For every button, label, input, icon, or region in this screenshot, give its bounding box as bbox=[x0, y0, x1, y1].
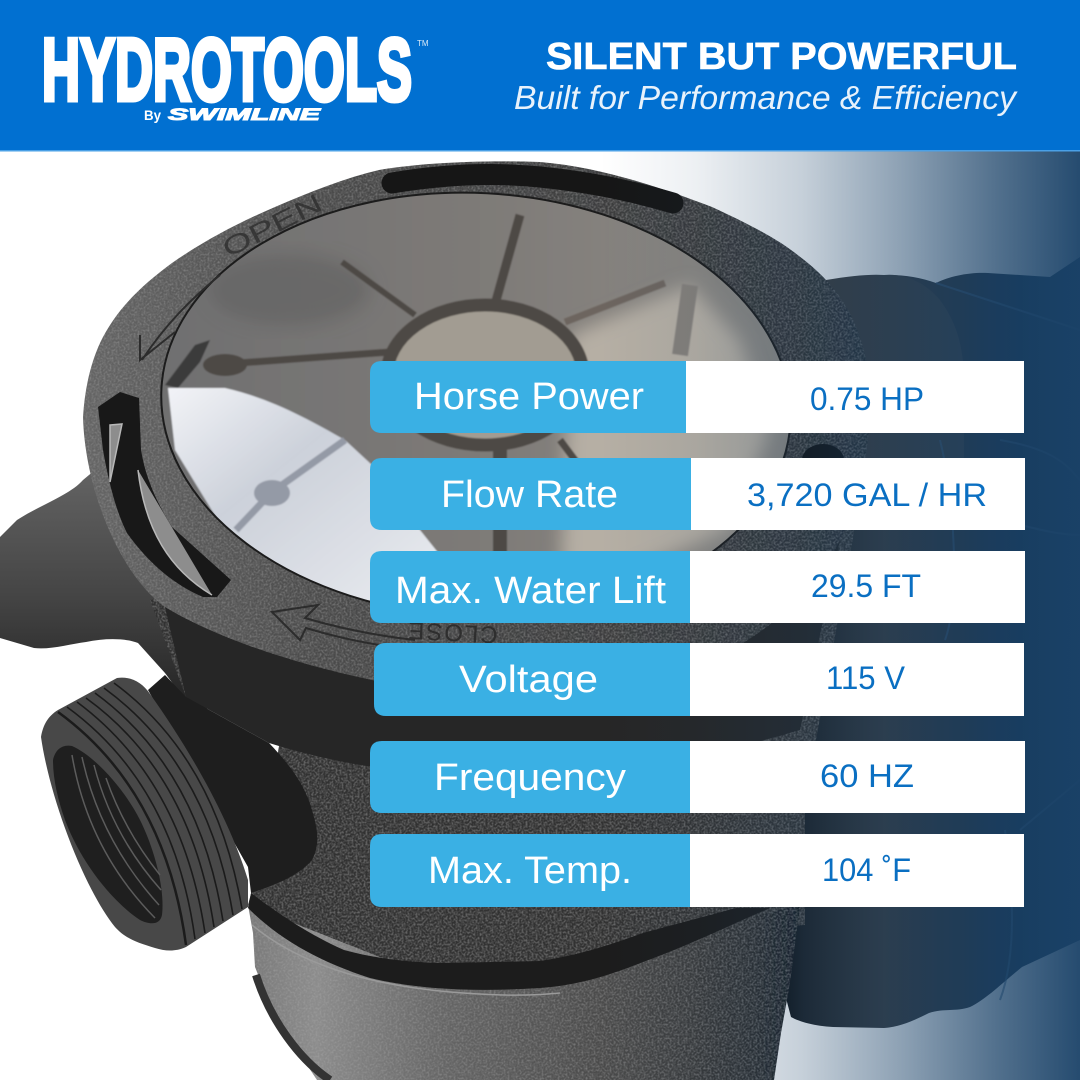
header background bbox=[0, 0, 1080, 150]
lens contents bbox=[162, 194, 788, 601]
cup bbox=[248, 905, 800, 1080]
header band bbox=[0, 0, 1080, 152]
lens right pale section bbox=[553, 281, 773, 551]
row: flow rate: Flow Rate bbox=[441, 474, 618, 516]
row: voltage: Voltage bbox=[459, 659, 598, 701]
lid left slot bbox=[98, 392, 231, 597]
gasket band bbox=[248, 893, 770, 990]
row: voltage bbox=[374, 643, 1024, 716]
lens edge bbox=[150, 177, 802, 633]
swimline: SWIMLINE bbox=[168, 105, 321, 124]
row: max water lift: Max. Water Lift bbox=[395, 570, 666, 612]
handle bbox=[0, 470, 260, 720]
lid close arrow bbox=[272, 605, 415, 650]
headline: SILENT BUT POWERFUL bbox=[546, 36, 1017, 78]
blue gradient overlay bbox=[600, 150, 1080, 1080]
threaded port bbox=[41, 678, 248, 950]
row: horse power: Horse Power bbox=[414, 376, 644, 418]
row: frequency bbox=[370, 741, 1025, 813]
row: voltage: 115 V bbox=[826, 660, 906, 696]
by: By bbox=[144, 107, 161, 123]
row: frequency: Frequency bbox=[434, 757, 626, 799]
port neck bbox=[148, 675, 317, 893]
spokes bbox=[225, 215, 690, 560]
lid top slot bbox=[392, 175, 673, 203]
row: horse power bbox=[370, 361, 1024, 433]
port threads bbox=[58, 683, 242, 945]
skirt and body bbox=[150, 500, 860, 975]
inner threads bbox=[72, 755, 161, 918]
lid hole bbox=[802, 444, 844, 476]
row: max temp bbox=[370, 834, 1024, 907]
row: max water lift bbox=[370, 551, 1025, 623]
reflected bulb bbox=[254, 480, 290, 506]
row: horse power: 0.75 HP bbox=[810, 381, 924, 417]
subheadline: Built for Performance & Efficiency bbox=[514, 79, 1019, 116]
hub interior bbox=[395, 310, 568, 440]
logo bbox=[42, 20, 429, 124]
trademark: TM bbox=[417, 39, 429, 48]
slot detail bbox=[110, 424, 212, 595]
header underline bbox=[0, 150, 1080, 152]
lens dark wedge bbox=[165, 340, 210, 388]
row: frequency: 60 HZ bbox=[820, 758, 914, 794]
row: flow rate bbox=[370, 458, 1025, 530]
row: max water lift: 29.5 FT bbox=[811, 568, 921, 604]
logo wordmark: HYDROTOOLS bbox=[42, 20, 412, 119]
spec table bbox=[370, 361, 1025, 907]
motor ridges bbox=[936, 283, 1080, 1000]
cup edge line bbox=[256, 975, 330, 1080]
lid ring bbox=[83, 161, 870, 691]
lens base bbox=[162, 194, 788, 551]
hub ring bbox=[387, 305, 583, 445]
spoke bulb bbox=[203, 354, 247, 376]
lid close label: CLOSE bbox=[406, 616, 498, 648]
rear motor housing bbox=[760, 257, 1080, 1028]
row: flow rate: 3,720 GAL / HR bbox=[747, 477, 987, 513]
cup highlight bbox=[252, 925, 560, 995]
reflected spoke bbox=[236, 440, 345, 530]
port outer body bbox=[41, 678, 248, 950]
port opening bbox=[53, 746, 163, 923]
row: max temp: Max. Temp. bbox=[428, 850, 632, 892]
lens bbox=[162, 194, 788, 601]
lid open arrow bbox=[140, 275, 220, 360]
skirt step shading bbox=[165, 540, 840, 775]
motor ear bbox=[826, 275, 964, 470]
white reflection bbox=[167, 386, 438, 601]
lid open label: OPEN bbox=[217, 188, 327, 263]
lens dark shading bbox=[219, 257, 366, 323]
row: max temp: 104 ˚F bbox=[822, 852, 911, 888]
